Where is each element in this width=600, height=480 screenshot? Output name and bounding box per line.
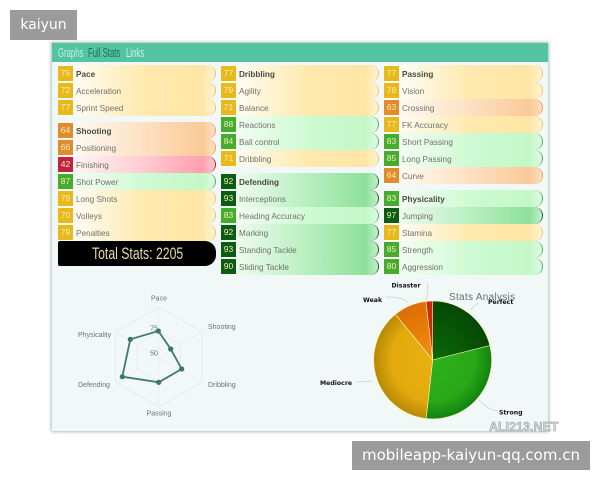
stat row: Positioning: 66 bbox=[61, 142, 70, 152]
stat row: Penalties: Penalties bbox=[76, 228, 110, 238]
stat row: Finishing: 42 bbox=[61, 159, 70, 169]
stat row: Physicality bbox=[384, 190, 543, 207]
stat row: Sprint Speed: Sprint Speed bbox=[76, 104, 123, 112]
stat row: Dribbling sub: 71 bbox=[224, 153, 233, 163]
header bar bbox=[52, 43, 548, 62]
stat row: Curve: 64 bbox=[387, 170, 396, 180]
stat row: Pace bbox=[58, 65, 216, 82]
stat row: Vision: Vision bbox=[402, 86, 424, 96]
stat row: Long Shots bbox=[58, 190, 216, 207]
stat row: Dribbling bbox=[221, 65, 379, 82]
stat row: Long Shots: Long Shots bbox=[76, 194, 117, 204]
stat row: Strength: 85 bbox=[387, 244, 396, 254]
radar labels: Dribbling bbox=[208, 382, 236, 389]
stat row: Dribbling sub: Dribbling bbox=[239, 154, 271, 164]
stat row: Shot Power: Shot Power bbox=[76, 178, 118, 186]
stat row: Acceleration: 72 bbox=[61, 85, 70, 95]
stat row: Balance: 71 bbox=[224, 102, 233, 112]
stat row: Strength: Strength bbox=[402, 246, 433, 254]
stat row: Ball control bbox=[221, 133, 379, 150]
overlay label: kaiyun bbox=[10, 10, 77, 40]
tab: Graphs: Graphs bbox=[58, 46, 83, 60]
stat row: Agility bbox=[221, 82, 379, 99]
stat row: Physicality: Physicality bbox=[402, 194, 445, 204]
stat row: Penalties: 79 bbox=[61, 227, 70, 237]
stat row: Standing Tackle bbox=[221, 241, 379, 258]
radar labels: Defending bbox=[78, 382, 110, 389]
stat row: Sprint Speed bbox=[58, 99, 216, 116]
stat row: Physicality: 83 bbox=[387, 193, 396, 203]
stat row: FK Accuracy: FK Accuracy bbox=[402, 120, 448, 130]
overlay label: kaiyun: kaiyun bbox=[20, 17, 67, 33]
stat row: Stamina: 77 bbox=[387, 227, 396, 237]
watermark: ALI213.NET: ALI213.NET bbox=[489, 420, 559, 434]
stat row: Short Passing: Short Passing bbox=[402, 138, 453, 146]
stat row: Stamina: Stamina bbox=[402, 228, 432, 238]
stat row: Defending: Defending bbox=[239, 178, 279, 186]
total stats bar bbox=[58, 241, 216, 266]
stat row: Positioning: Positioning bbox=[76, 144, 116, 152]
stat row: Dribbling: Dribbling bbox=[239, 70, 275, 78]
stat row: Long Passing: 85 bbox=[387, 153, 396, 163]
stat row: Volleys: 70 bbox=[61, 210, 70, 220]
slice: Weak bbox=[395, 301, 433, 360]
radar chart bbox=[78, 296, 236, 418]
stat row: Finishing: Finishing bbox=[76, 160, 109, 170]
radar labels: Shooting bbox=[208, 324, 236, 331]
stat row: Interceptions bbox=[221, 190, 379, 207]
stat row: Crossing: 63 bbox=[387, 102, 396, 112]
stat row: Heading Accuracy: Heading Accuracy bbox=[239, 212, 305, 220]
stat row: Crossing: Crossing bbox=[402, 104, 434, 112]
stat row: Interceptions: 93 bbox=[224, 193, 233, 203]
stat row: Shooting bbox=[58, 122, 216, 139]
stat row: Vision bbox=[384, 82, 543, 99]
stat row: Finishing bbox=[58, 156, 216, 173]
pie labels: Disaster bbox=[392, 282, 421, 290]
stat row: Pace: 75 bbox=[61, 68, 70, 78]
stat row: Reactions bbox=[221, 116, 379, 133]
stat row: Shooting: 64 bbox=[61, 125, 70, 135]
stat row: Sliding Tackle: 90 bbox=[224, 261, 233, 271]
stat row: Volleys bbox=[58, 207, 216, 224]
stat row: Aggression: 80 bbox=[387, 261, 396, 271]
radar labels: Physicality bbox=[78, 332, 112, 339]
pie labels bbox=[320, 282, 523, 416]
pie title: Stats Analysis bbox=[449, 292, 515, 303]
stat row: Standing Tackle: 93 bbox=[224, 244, 233, 254]
stat row: Jumping: Jumping bbox=[402, 212, 433, 220]
stat row: FK Accuracy bbox=[384, 116, 543, 133]
stat row: Long Passing: Long Passing bbox=[402, 154, 452, 164]
pie chart bbox=[374, 301, 492, 419]
stat row: Volleys: Volleys bbox=[76, 212, 102, 220]
stat row: Sliding Tackle bbox=[221, 258, 379, 275]
stat row: Acceleration bbox=[58, 82, 216, 99]
stat row: FK Accuracy: 77 bbox=[387, 119, 396, 129]
radar labels: Pace bbox=[151, 296, 167, 302]
slice: Strong bbox=[426, 346, 492, 419]
stat row: Long Shots: 79 bbox=[61, 193, 70, 203]
stat row: Passing: Passing bbox=[402, 70, 433, 78]
stat row: Ball control: Ball control bbox=[239, 138, 280, 146]
stat row: Aggression bbox=[384, 258, 543, 275]
main panel bbox=[52, 43, 548, 431]
stat row: Positioning bbox=[58, 139, 216, 156]
stat row: Aggression: Aggression bbox=[402, 262, 443, 272]
stat row: Curve bbox=[384, 167, 543, 184]
pie leader lines bbox=[356, 283, 498, 411]
stat row: Stamina bbox=[384, 224, 543, 241]
stat row: Reactions: 88 bbox=[224, 119, 233, 129]
radar labels: 75 bbox=[150, 326, 158, 332]
stat row: Sprint Speed: 77 bbox=[61, 102, 70, 112]
tab: Links: Links bbox=[126, 46, 144, 60]
overlay label: site url bbox=[352, 441, 590, 470]
stat row: Jumping: 97 bbox=[387, 210, 396, 220]
stat row: Shot Power bbox=[58, 173, 216, 190]
pie labels: Strong bbox=[499, 410, 523, 416]
stat row: Passing: 77 bbox=[387, 68, 396, 78]
stat row: Sliding Tackle: Sliding Tackle bbox=[239, 262, 289, 272]
slice: Disaster bbox=[426, 301, 433, 360]
stat row: Standing Tackle: Standing Tackle bbox=[239, 246, 297, 254]
stat row: Marking bbox=[221, 224, 379, 241]
stat row: Short Passing bbox=[384, 133, 543, 150]
stat row: Dribbling sub bbox=[221, 150, 379, 167]
stat row: Heading Accuracy: 83 bbox=[224, 210, 233, 220]
stat row: Penalties bbox=[58, 224, 216, 241]
stat row: Long Passing bbox=[384, 150, 543, 167]
stat row: Acceleration: Acceleration bbox=[76, 86, 121, 96]
slice: Perfect bbox=[433, 301, 490, 360]
stat row: Curve: Curve bbox=[402, 172, 424, 180]
stat row: Balance bbox=[221, 99, 379, 116]
stat row: Dribbling: 77 bbox=[224, 68, 233, 78]
stat row: Crossing bbox=[384, 99, 543, 116]
radar labels: 50 bbox=[150, 350, 158, 358]
stat row: Vision: 78 bbox=[387, 85, 396, 95]
stat row: Interceptions: Interceptions bbox=[239, 194, 286, 204]
pie labels: Weak bbox=[363, 297, 383, 304]
stat row: Marking: Marking bbox=[239, 228, 268, 238]
stat row: Balance: Balance bbox=[239, 104, 269, 112]
radar labels bbox=[78, 296, 236, 418]
stat row: Agility: Agility bbox=[239, 86, 261, 96]
radar labels: Passing bbox=[147, 410, 172, 418]
overlay label: site url: mobileapp-kaiyun-qq.com.cn bbox=[362, 446, 580, 464]
stat row: Pace: Pace bbox=[76, 70, 95, 78]
stat row: Heading Accuracy bbox=[221, 207, 379, 224]
tab: Full Stats: Full Stats bbox=[88, 46, 120, 60]
pie labels: Mediocre bbox=[320, 380, 352, 387]
pie labels: Perfect bbox=[488, 299, 513, 306]
stat row: Agility: 79 bbox=[224, 85, 233, 95]
stat row: Strength bbox=[384, 241, 543, 258]
stat row: Marking: 92 bbox=[224, 227, 233, 237]
stat row: Ball control: 84 bbox=[224, 136, 233, 146]
stat row: Reactions: Reactions bbox=[239, 120, 275, 130]
radar data polygon bbox=[120, 328, 184, 385]
stat row: Passing bbox=[384, 65, 543, 82]
stat row: Shooting: Shooting bbox=[76, 126, 111, 136]
total stats bar: Total Stats: 2205 bbox=[92, 244, 183, 263]
slice: Mediocre bbox=[374, 314, 433, 419]
stat row: Jumping bbox=[384, 207, 543, 224]
stat row: Defending bbox=[221, 173, 379, 190]
stat row: Shot Power: 87 bbox=[61, 176, 70, 186]
stat row: Defending: 92 bbox=[224, 176, 233, 186]
stat row: Short Passing: 83 bbox=[387, 136, 396, 146]
